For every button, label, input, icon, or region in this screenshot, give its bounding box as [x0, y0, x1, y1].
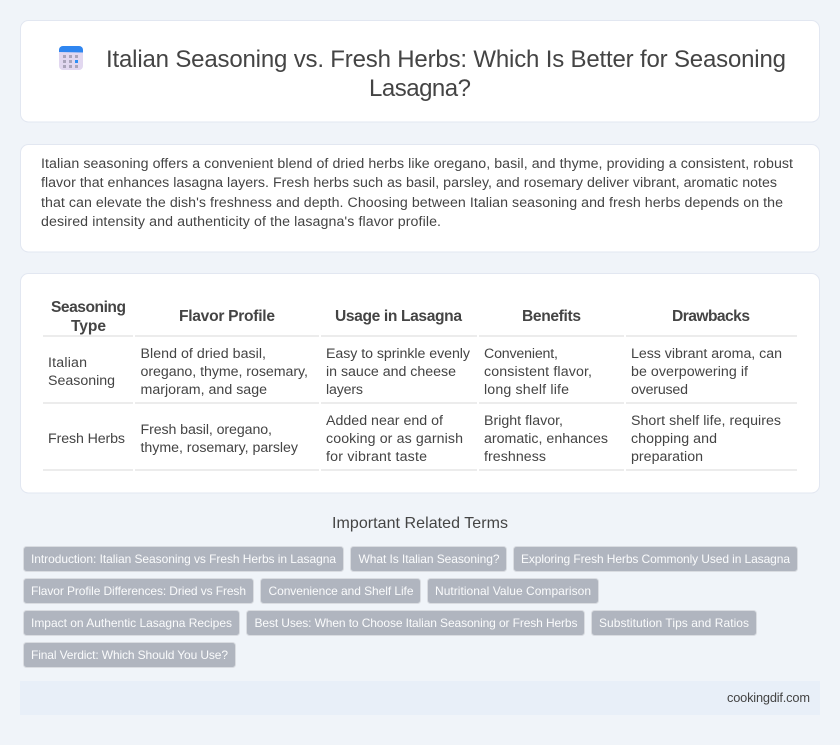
footer — [20, 681, 820, 715]
tag — [24, 610, 240, 636]
table header row: Type — [71, 318, 106, 335]
table row: Fresh Herbs: Added near end of — [326, 413, 443, 429]
tag — [246, 610, 584, 636]
table header row: Usage in Lasagna — [335, 308, 462, 325]
tag — [24, 642, 236, 668]
tag list: related terms — [24, 546, 798, 668]
tag — [24, 578, 254, 604]
table header row: Flavor Profile — [179, 308, 275, 325]
tag — [24, 546, 344, 572]
table header row: Benefits — [522, 308, 581, 325]
table row: Italian Seasoning: Italian — [48, 355, 87, 371]
tag: Best Uses: When to Choose Italian Seasoning or Fresh Herbs — [254, 616, 578, 630]
tag: Introduction: Italian Seasoning vs Fresh Herbs in Lasagna — [31, 552, 336, 566]
table row: Fresh Herbs: freshness — [484, 449, 546, 465]
title: Lasagna? — [369, 75, 471, 102]
table row: Fresh Herbs: cooking or as garnish — [326, 431, 463, 447]
text block: introduction paragraph — [41, 156, 793, 230]
tag: Nutritional Value Comparison — [435, 584, 591, 598]
table header row: Seasoning — [51, 299, 126, 316]
table row: Fresh Herbs — [48, 413, 781, 465]
tag: Final Verdict: Which Should You Use? — [31, 648, 228, 662]
tag: Substitution Tips and Ratios — [599, 616, 749, 630]
tag — [350, 546, 506, 572]
table row: Italian Seasoning: Easy to sprinkle evenly — [326, 346, 471, 362]
tag — [428, 578, 598, 604]
table row: Fresh Herbs: aromatic, enhances — [484, 431, 608, 447]
panel: title card — [20, 20, 820, 122]
table row: Fresh Herbs: chopping and — [631, 431, 717, 447]
text block: introduction paragraph: desired intensity and authenticity of the lasagna's flavor profile. — [41, 214, 441, 230]
tag: Impact on Authentic Lasagna Recipes — [31, 616, 232, 630]
text block: introduction paragraph: flavor that enhances lasagna layers. Fresh herbs such as basil, parsley, and rosemary deliver vibrant, aromatic notes — [41, 175, 777, 191]
tag: Convenience and Shelf Life — [268, 584, 414, 598]
table row: Fresh Herbs: Bright flavor, — [484, 413, 563, 429]
table row: Fresh Herbs: for vibrant taste — [326, 449, 427, 465]
table header row — [51, 299, 750, 335]
table header row: Drawbacks — [672, 308, 750, 325]
table row: Italian Seasoning: Blend of dried basil, — [140, 346, 266, 362]
title — [106, 46, 786, 102]
table row: Italian Seasoning: long shelf life — [484, 382, 569, 398]
panel: comparison table — [20, 274, 820, 493]
tag: Flavor Profile Differences: Dried vs Fresh — [31, 584, 246, 598]
tag: What Is Italian Seasoning? — [358, 552, 500, 566]
table row: Fresh Herbs: preparation — [631, 449, 703, 465]
text block: introduction paragraph: Italian seasoning offers a convenient blend of dried herbs like oregano, basil, and thyme, providing a consistent, robust — [41, 156, 793, 172]
icon: calendar — [59, 46, 83, 70]
tag: Exploring Fresh Herbs Commonly Used in Lasagna — [521, 552, 790, 566]
table row: Fresh Herbs: thyme, rosemary, parsley — [140, 440, 299, 456]
table row: Italian Seasoning: consistent flavor, — [484, 364, 592, 380]
table row: Italian Seasoning: Convenient, — [484, 346, 558, 362]
table row: Italian Seasoning: Less vibrant aroma, can — [631, 346, 782, 362]
table row: Italian Seasoning: overused — [631, 382, 688, 398]
tag — [260, 578, 420, 604]
table row: Italian Seasoning: in sauce and cheese — [326, 364, 456, 380]
table row: Italian Seasoning: be overpowering if — [631, 364, 748, 380]
table row: Italian Seasoning — [48, 346, 782, 398]
title: Italian Seasoning vs. Fresh Herbs: Which Is Better for Seasoning — [106, 46, 786, 73]
panel: introduction — [20, 144, 820, 252]
table row: Italian Seasoning: oregano, thyme, rosemary, — [140, 364, 308, 380]
tag — [592, 610, 756, 636]
table row: Italian Seasoning: layers — [326, 382, 363, 398]
heading: related terms: Important Related Terms — [332, 515, 508, 532]
table row: Fresh Herbs: Fresh Herbs — [48, 431, 125, 447]
tag — [514, 546, 798, 572]
footer: cookingdif.com — [727, 690, 810, 705]
text block: introduction paragraph: that can elevate the dish's freshness and depth. Choosing between Italian seasoning and fresh herbs depends on the — [41, 195, 783, 211]
table row: Fresh Herbs: Short shelf life, requires — [631, 413, 781, 429]
table row: Fresh Herbs: Fresh basil, oregano, — [140, 422, 272, 438]
table row: Italian Seasoning: Seasoning — [48, 373, 115, 389]
table row: Italian Seasoning: marjoram, and sage — [140, 382, 267, 398]
